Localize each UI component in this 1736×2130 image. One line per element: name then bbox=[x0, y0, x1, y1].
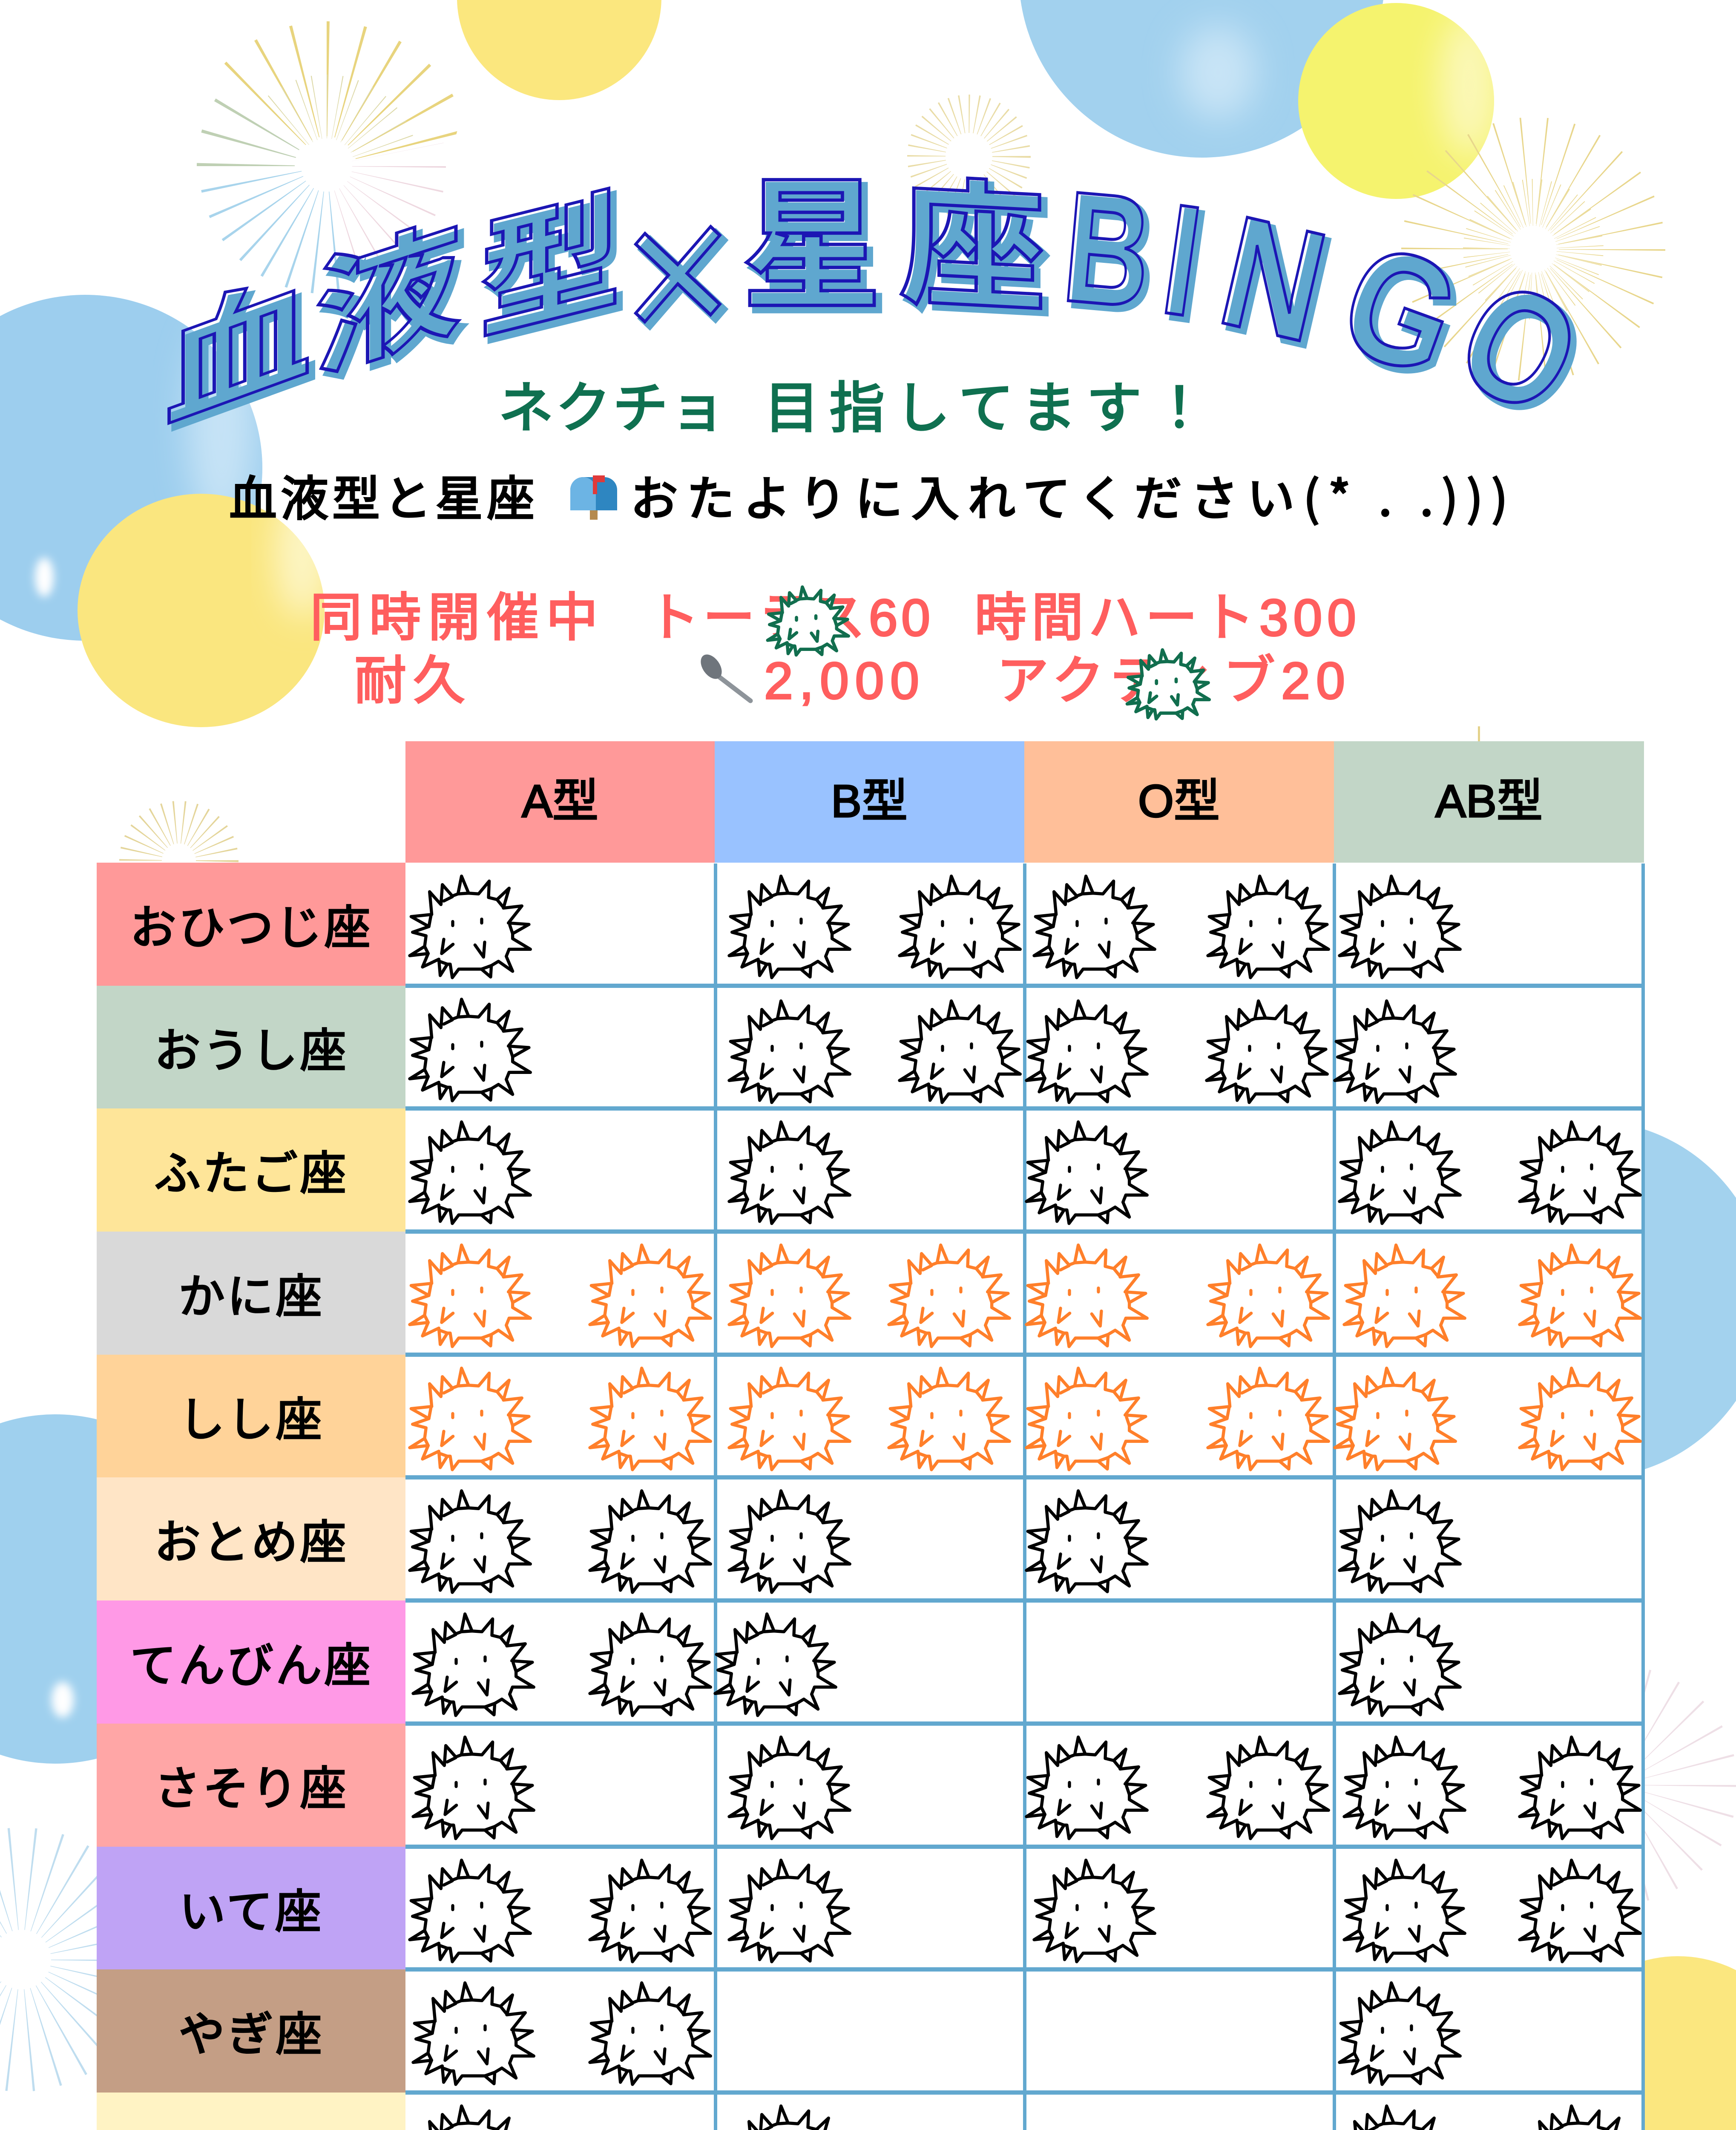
row: さそり座: さそり座 bbox=[154, 1752, 348, 1818]
row: さそり座 bbox=[97, 1724, 1640, 1847]
header B型 bbox=[715, 741, 1024, 863]
row: かに座: かに座 bbox=[178, 1259, 324, 1327]
title: 星 bbox=[742, 130, 882, 337]
title: 血 bbox=[164, 223, 312, 455]
row: おひつじ座: おひつじ座 bbox=[130, 890, 373, 958]
row: ふたご座 bbox=[97, 1108, 1640, 1232]
simultaneous event info: 耐久 bbox=[354, 652, 465, 710]
table: grid bbox=[405, 863, 1644, 2130]
small firework tick above table bbox=[1478, 726, 1480, 742]
title bbox=[164, 130, 1611, 461]
row: いて座 bbox=[97, 1847, 1640, 1969]
table: blood type header bbox=[405, 741, 1644, 863]
row: おひつじ座 bbox=[97, 863, 1460, 986]
subtitle: 目指してます！ bbox=[764, 377, 1207, 439]
row: しし座: しし座 bbox=[178, 1383, 324, 1449]
title: 血 bbox=[170, 228, 317, 461]
instruction line bbox=[229, 461, 1508, 530]
firework: multicolor top left bbox=[239, 79, 414, 253]
title: 座 bbox=[899, 132, 1046, 340]
icon: green urchin over トーラス bbox=[767, 587, 848, 655]
row: やぎ座: やぎ座 bbox=[178, 1997, 324, 2064]
title: × bbox=[619, 168, 747, 376]
title: O bbox=[1433, 245, 1606, 449]
title: 星 bbox=[747, 135, 887, 343]
subtitle: ネクチョ bbox=[498, 377, 725, 439]
simultaneous event info: アクティブ20 bbox=[997, 652, 1345, 710]
row: いて座: いて座 bbox=[179, 1874, 323, 1942]
title: 型 bbox=[479, 144, 622, 368]
row: おとめ座: おとめ座 bbox=[154, 1505, 348, 1572]
firework: left side bbox=[0, 1879, 102, 2041]
row: みずがめ座 bbox=[97, 2093, 1640, 2130]
header A型 bbox=[405, 741, 715, 863]
icon: green urchin over アクティブ bbox=[1127, 650, 1209, 719]
title: I bbox=[1153, 171, 1210, 350]
title: O bbox=[1438, 250, 1611, 455]
simultaneous event info: トーラス60 bbox=[647, 589, 930, 647]
row: おうし座: おうし座 bbox=[154, 1014, 348, 1080]
title: × bbox=[614, 163, 742, 371]
title: N bbox=[1212, 187, 1345, 380]
row: やぎ座 bbox=[97, 1969, 1460, 2093]
header AB型 bbox=[1334, 741, 1644, 863]
simultaneous event info bbox=[310, 589, 1356, 710]
header O型: O型 bbox=[1138, 775, 1220, 826]
row: ふたご座: ふたご座 bbox=[154, 1137, 348, 1203]
row: おうし座 bbox=[97, 986, 1455, 1108]
firework: gold top right bbox=[1454, 170, 1612, 328]
icon: mailbox bbox=[570, 475, 617, 520]
simultaneous event info: 2,000 bbox=[764, 652, 919, 710]
header O型 bbox=[1024, 741, 1334, 863]
title: N bbox=[1207, 182, 1340, 375]
title: 座 bbox=[904, 138, 1051, 345]
title: 型 bbox=[484, 149, 627, 373]
instruction line: 血液型と星座 bbox=[229, 461, 535, 530]
header B型: B型 bbox=[831, 775, 908, 826]
instruction line: おたよりに入れてください(* . .))) bbox=[630, 461, 1508, 530]
subtitle bbox=[498, 377, 1207, 439]
firework: small gold top center bbox=[926, 114, 1012, 199]
simultaneous event info: 時間ハート300 bbox=[974, 589, 1356, 647]
row: てんびん座: てんびん座 bbox=[130, 1628, 373, 1695]
icon: spoon bbox=[696, 651, 750, 701]
row: おとめ座 bbox=[97, 1477, 1460, 1600]
simultaneous event info: 同時開催中 bbox=[310, 589, 598, 647]
title: G bbox=[1321, 209, 1480, 410]
title: B bbox=[1062, 164, 1163, 346]
row: かに座 bbox=[97, 1232, 1640, 1355]
firework: right side pale bbox=[1546, 1713, 1691, 1857]
title: I bbox=[1158, 176, 1216, 355]
title: 液 bbox=[314, 173, 461, 405]
row: てんびん座 bbox=[97, 1600, 1460, 1724]
title: B bbox=[1057, 158, 1158, 341]
title: G bbox=[1326, 214, 1485, 415]
header AB型: AB型 bbox=[1435, 775, 1543, 826]
header A型: A型 bbox=[522, 775, 598, 826]
row: しし座 bbox=[97, 1355, 1640, 1477]
title: 液 bbox=[319, 178, 466, 410]
firework: gold behind table top left bbox=[141, 822, 217, 899]
